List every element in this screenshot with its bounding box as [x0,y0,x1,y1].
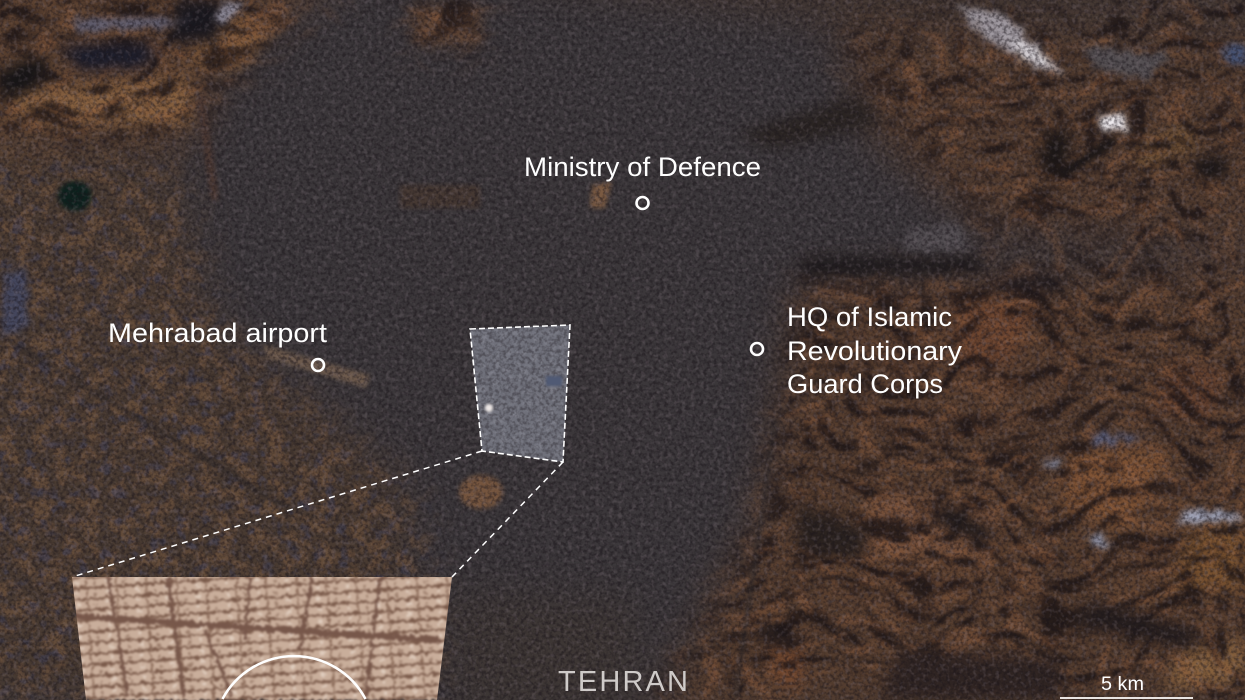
marker: HQ of Islamic Revolutionary Guard Corps [751,302,963,399]
airport sand strip [262,345,370,388]
marker: HQ of Islamic Revolutionary Guard Corps: Revolutionary [787,336,963,366]
scale bar [1060,674,1193,699]
west: lake [58,181,92,211]
north ridge [380,0,1245,40]
inset: zoomed neighbourhood [62,572,462,700]
dashed connector lines [72,451,563,577]
west roads [200,95,215,200]
north-west foothills [0,0,360,150]
snow and blue-grey patches [955,5,1068,75]
marker: Mehrabad airport [108,318,328,371]
brown city patches [590,182,612,208]
ridge below HQ [800,275,930,297]
marker: Ministry of Defence [524,152,761,209]
scale bar: 5 km [1101,674,1144,695]
marker: HQ of Islamic Revolutionary Guard Corps: Guard Corps [787,369,943,399]
marker: Mehrabad airport: Mehrabad airport [108,318,328,348]
southern patch [459,475,503,509]
orange slopes [10,75,190,125]
dark valleys [800,258,985,276]
inset circle [222,656,366,699]
marker: HQ of Islamic Revolutionary Guard Corps: HQ of Islamic [787,302,952,332]
mottled western suburbs [0,153,448,700]
city label: TEHRAN [558,666,688,698]
west suburbs [0,150,430,700]
marker: Ministry of Defence: Ministry of Defence [524,152,761,182]
east mountains [650,260,1245,700]
highlighted area on map [469,324,571,463]
